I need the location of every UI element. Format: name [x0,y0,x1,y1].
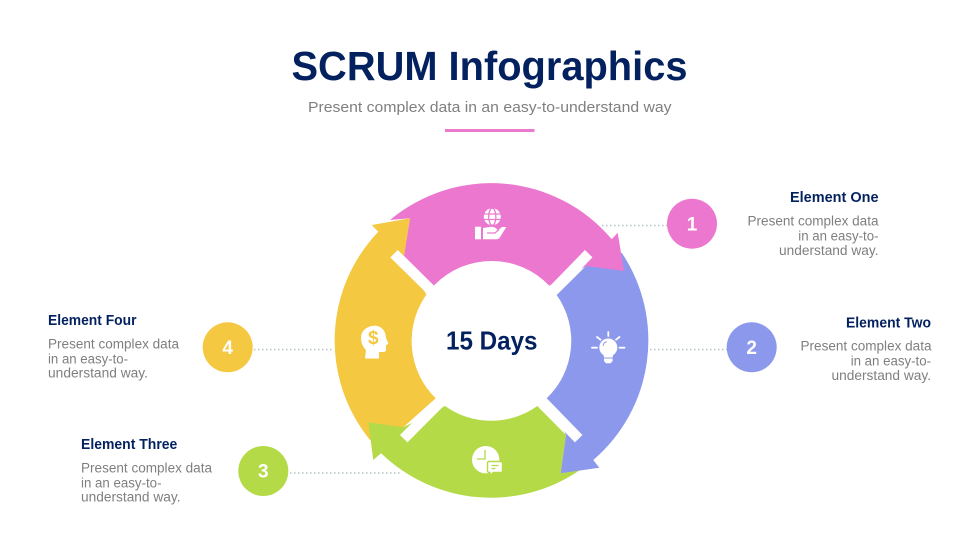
icon: head with dollar [361,326,388,358]
body: element two [800,338,932,383]
icon: hand holding globe [475,208,506,239]
icon: clock and speech bubble [472,446,502,476]
badge 4 [203,322,253,372]
element two block [727,315,932,383]
body: element four: in an easy-to- [48,351,128,366]
heading: element two: Element Two [846,315,931,331]
body: element three: understand way. [81,490,180,505]
badge 1: 1 [687,214,698,236]
title accent underline [445,129,534,132]
element one block [667,190,879,258]
body: element one: Present complex data [748,214,879,228]
centre disc [412,261,571,420]
heading: element one: Element One [790,190,878,206]
connector: element two [650,348,727,350]
body: element three: in an easy-to- [81,475,162,490]
title: SCRUM Infographics [292,43,688,89]
segment: yellow arrow [335,218,436,440]
subtitle: Present complex data in an easy-to-understand way [308,99,672,116]
body: element one: understand way. [779,243,878,258]
heading: element three: Element Three [81,437,177,453]
segment: pink arrow [390,183,624,286]
icon: bulb [592,332,624,363]
body: element two: Present complex data [800,338,932,354]
badge 4: 4 [222,338,233,359]
badge 2 [727,322,777,372]
segment: green arrow [368,406,580,498]
badge 1 [667,199,717,249]
badge 3 [238,446,288,496]
body: element two: in an easy-to- [851,354,931,368]
body: element four: Present complex data [48,336,179,351]
element three block [81,437,288,505]
heading: element four: Element Four [48,313,137,329]
badge 2: 2 [746,338,757,359]
connector: element three [290,472,401,474]
body: element three [81,460,212,505]
icon: head with dollar: $ [368,328,379,349]
body: element one [748,214,879,258]
body: element four: understand way. [48,366,148,381]
body: element four [48,336,179,381]
connector: element one [602,224,667,226]
badge 3: 3 [258,462,269,483]
element four block [48,313,253,381]
body: element one: in an easy-to- [798,228,878,244]
body: element two: understand way. [832,368,931,383]
white separators [394,254,589,439]
connector: element four [254,348,334,350]
body: element three: Present complex data [81,460,212,475]
segment: blue arrow [547,253,648,473]
cycle diagram [335,183,648,498]
centre label: 15 Days [446,326,538,356]
